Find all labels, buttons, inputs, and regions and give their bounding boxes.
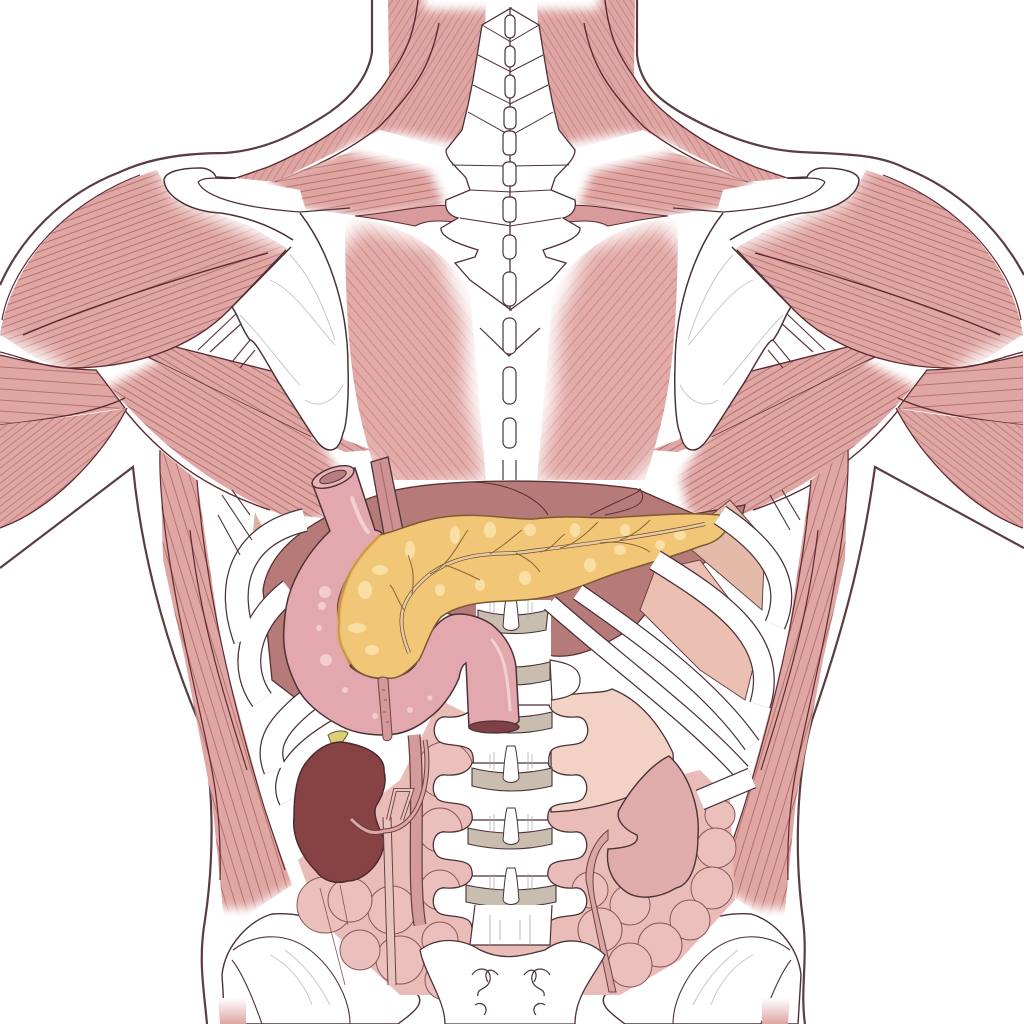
right flank muscle: [716, 450, 848, 1024]
organ: liver: [252, 481, 745, 700]
bone: sacrum: [420, 941, 605, 1024]
organ: tan organ upper right: [640, 560, 760, 700]
organ: right kidney: [586, 756, 698, 992]
right side back muscles and scapula: [537, 0, 1023, 1024]
left flank muscle: [160, 450, 292, 1024]
organ: spleen panel: [680, 500, 765, 610]
vessel: renal vein and left ureter: [351, 735, 427, 985]
thoracic spine: [441, 8, 580, 480]
organ: bile duct: [378, 677, 392, 741]
organ: tube artery: [371, 457, 404, 540]
organ: left kidney: [294, 742, 385, 882]
left side back muscles and scapula: [0, 0, 486, 1024]
organ: stomach: [551, 689, 673, 812]
organ: gallbladder sliver: [328, 731, 348, 748]
organ: pancreas: [339, 514, 727, 678]
bone: lumbar vertebrae: [433, 594, 588, 945]
organ: intestines: [297, 700, 736, 1000]
bone: left ribs: [218, 490, 338, 800]
bone: right ribs over abdomen: [550, 490, 800, 800]
organ: duodenum and stomach tube: [284, 461, 519, 735]
